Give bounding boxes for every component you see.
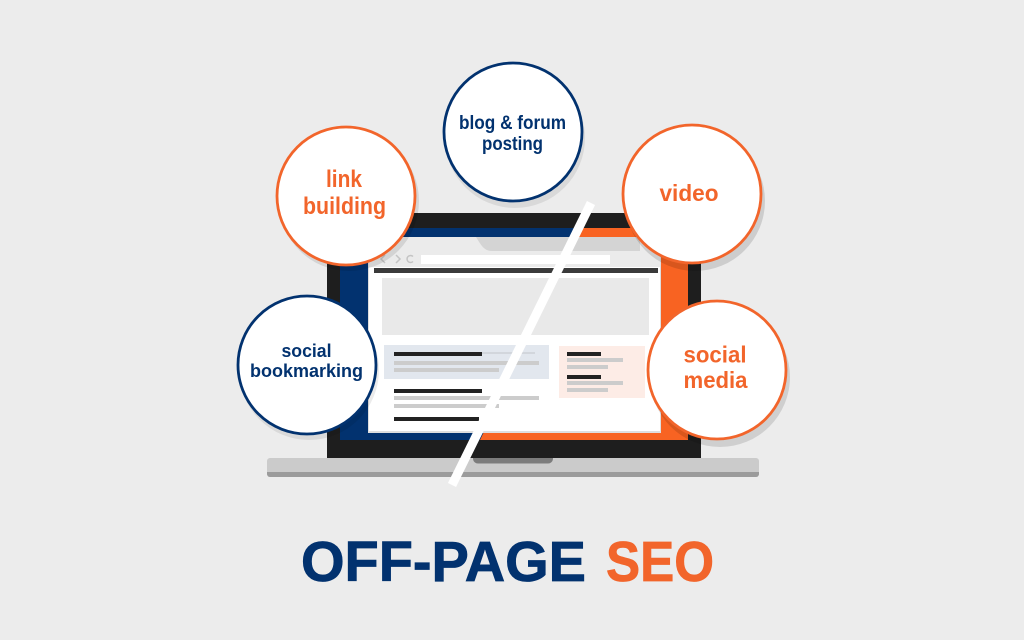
circle: social media: media	[684, 367, 748, 393]
laptop base	[267, 458, 759, 477]
navy tinted content box	[384, 345, 549, 379]
circle: video: video	[660, 180, 718, 206]
page header bar	[374, 268, 658, 273]
circle: blog and forum posting: blog & forum	[459, 113, 566, 134]
screen: orange half	[480, 228, 688, 440]
title: SEO	[606, 530, 714, 594]
diagonal divider	[452, 203, 591, 485]
circle: blog and forum posting: posting	[482, 134, 543, 155]
orange tinted content box	[559, 346, 645, 398]
circle: social bookmarking: social	[282, 341, 332, 361]
circle: social media: social	[684, 342, 746, 368]
circle: blog and forum posting	[444, 63, 585, 208]
browser nav icons	[381, 255, 413, 263]
title: OFF-PAGE	[301, 530, 586, 594]
circle: social bookmarking: bookmarking	[250, 361, 363, 381]
right column text lines	[567, 352, 623, 392]
browser window	[368, 237, 661, 433]
circle: link building: link	[326, 166, 363, 193]
laptop illustration	[267, 213, 759, 477]
circle: social bookmarking	[238, 296, 379, 440]
left column text lines	[394, 352, 539, 421]
screen: navy half	[340, 228, 582, 440]
circle: video	[623, 125, 765, 271]
laptop bezel	[327, 213, 701, 458]
address bar	[421, 255, 610, 264]
circle: link building	[277, 127, 419, 271]
circle: link building: building	[303, 193, 386, 220]
circle: social media	[648, 301, 790, 447]
page hero block	[382, 278, 649, 335]
web page	[369, 267, 660, 431]
